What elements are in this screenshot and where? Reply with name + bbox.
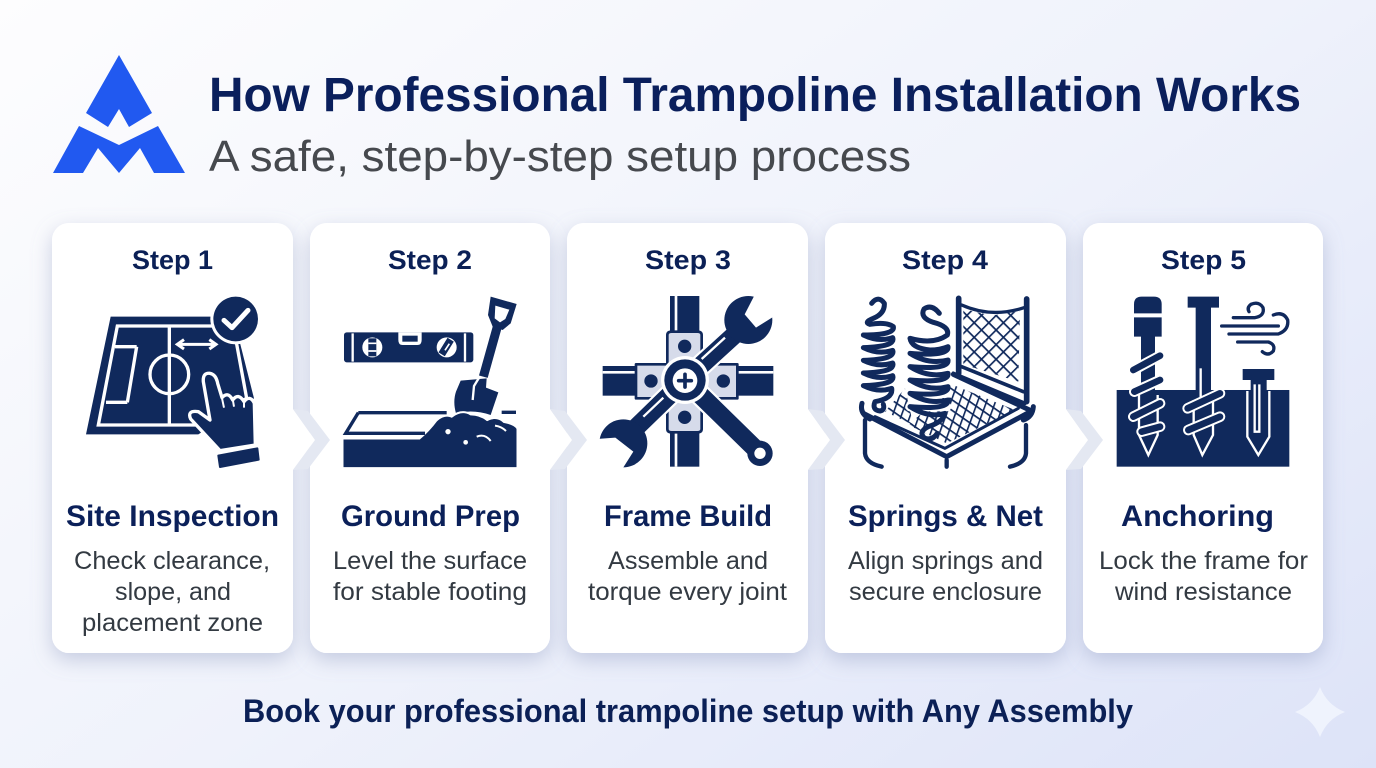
step 2 description: Level the surface [333,547,527,575]
step 2 label: Step 2 [388,245,472,275]
step 2 title: Ground Prep [341,500,520,533]
step 4 label: Step 4 [902,245,988,275]
panel: step 2 [310,223,550,653]
footer call to action: Book your professional trampoline setup with Any Assembly [243,693,1133,729]
step 5 description: Lock the frame for [1099,547,1308,575]
arrow: step 1 to 2 [293,409,330,470]
panel: step 3 [567,223,808,653]
step 1 title: Site Inspection [66,500,279,533]
step 5 description: wind resistance [1114,578,1292,606]
step 5 label: Step 5 [1161,245,1246,275]
step 2 description: for stable footing [333,578,527,606]
step 2 description [333,547,527,606]
panel: step 5 [1083,223,1323,653]
step 3 description [588,547,787,606]
icon: site map with hand and check [86,294,261,467]
logo [53,55,185,173]
step 3 description: Assemble and [608,547,768,575]
step 5 title: Anchoring [1121,500,1274,533]
step 4 description: Align springs and [848,547,1043,575]
panel: step 1 [52,223,293,653]
icon: springs and net [861,298,1033,467]
subtitle: A safe, step-by-step setup process [209,132,911,181]
title: How Professional Trampoline Installation Works [209,69,1301,122]
step 1 description: placement zone [82,609,263,637]
step 1 description: slope, and [115,578,231,606]
icon: sparkle [1295,687,1345,737]
step 3 description: torque every joint [588,578,787,606]
icon: ground anchors and wind [1117,297,1289,467]
panel: step 4 [825,223,1066,653]
arrow: step 2 to 3 [550,409,587,470]
step 4 description: secure enclosure [849,578,1042,606]
step 4 title: Springs & Net [848,500,1043,533]
arrow: step 4 to 5 [1066,409,1103,470]
step 5 description [1099,547,1308,606]
step 1 label: Step 1 [132,245,213,275]
step 1 description: Check clearance, [74,547,270,575]
step 3 label: Step 3 [645,245,731,275]
arrow: step 3 to 4 [808,409,845,470]
step 1 description [74,547,270,637]
icon: level, shovel and soil [344,297,517,467]
step 4 description [848,547,1043,606]
icon: frame joint and wrenches [595,292,782,472]
step 3 title: Frame Build [604,500,772,533]
